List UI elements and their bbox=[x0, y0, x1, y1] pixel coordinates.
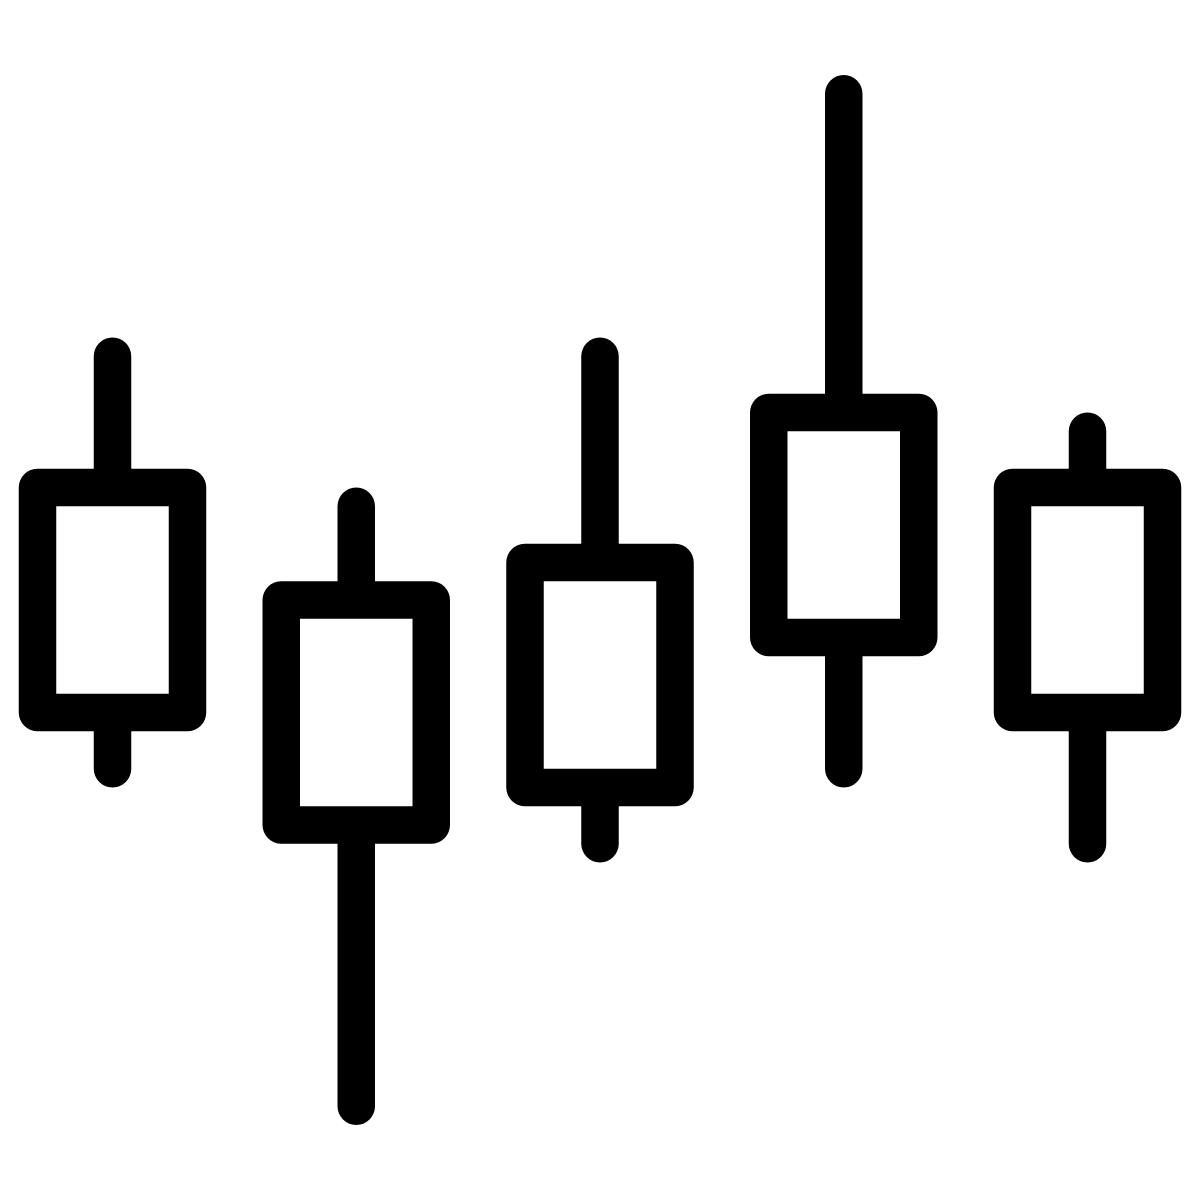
candlestick 5 bbox=[1012, 431, 1162, 844]
candlestick 2 bbox=[281, 506, 431, 1106]
candlestick 4 bbox=[769, 94, 919, 769]
candlestick 3 bbox=[525, 356, 675, 844]
candlestick 1 bbox=[38, 356, 188, 769]
